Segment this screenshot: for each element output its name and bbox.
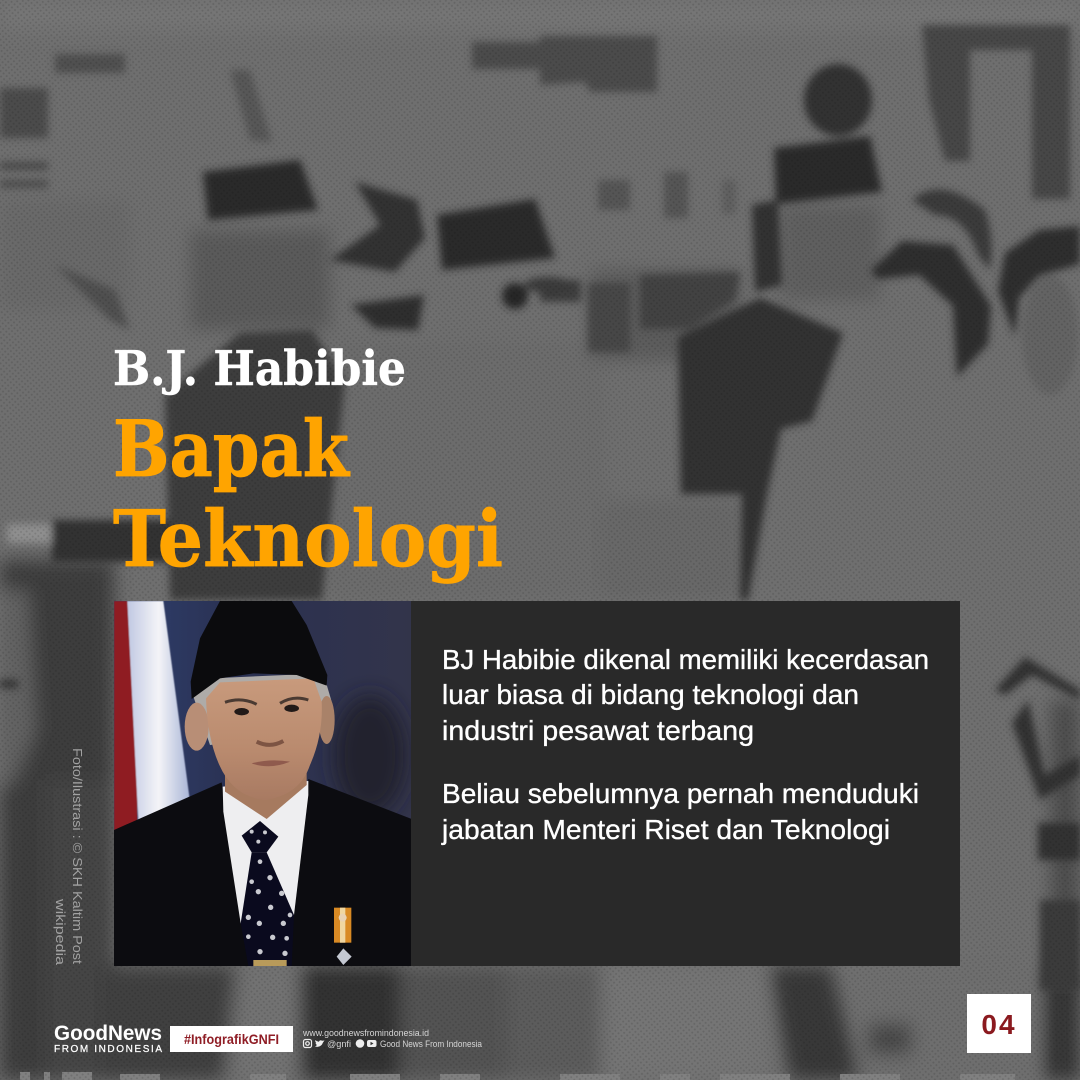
text block: paragraph 2: jabatan Menteri Riset dan Teknologi <box>441 814 890 845</box>
title: Bapak Teknologi: Teknologi <box>113 494 503 585</box>
icon: facebook <box>356 1039 364 1048</box>
photo credit vertical text <box>53 748 85 966</box>
logo: GoodNews From Indonesia <box>54 1021 162 1055</box>
tie <box>241 821 294 966</box>
dark suits <box>165 330 345 600</box>
title: B.J. Habibie: B.J. Habibie <box>113 341 406 397</box>
photo credit vertical text: wikipedia <box>53 898 68 966</box>
logo: GoodNews From Indonesia: FROM INDONESIA <box>54 1044 162 1055</box>
text block: paragraph 2 <box>441 778 919 845</box>
title: Bapak Teknologi: Bapak <box>113 404 351 495</box>
man two mess <box>330 182 425 272</box>
photo credit vertical text: Foto/Ilustrasi : © SKH Kaltim Post <box>70 748 85 964</box>
logo: GoodNews From Indonesia: GoodNews <box>54 1021 162 1045</box>
hashtag badge: #InfografikGNFI <box>184 1032 279 1047</box>
text block: paragraph 1: luar biasa di bidang teknologi dan <box>442 679 859 710</box>
social links: www.goodnewsfromindonesia.id <box>302 1028 429 1038</box>
text block: paragraph 1: BJ Habibie dikenal memiliki kecerdasan <box>442 644 929 675</box>
text block: paragraph 1 <box>442 644 929 746</box>
social links: Good News From Indonesia <box>380 1039 482 1049</box>
icon: instagram <box>304 1040 312 1048</box>
social links: @gnfi <box>327 1039 351 1049</box>
social links <box>302 1028 482 1049</box>
hair and ears <box>192 673 333 745</box>
peci hats <box>203 160 318 220</box>
lower right folds <box>995 657 1080 700</box>
suit <box>114 782 250 970</box>
hashtag badge <box>170 1026 293 1052</box>
title: Bapak Teknologi <box>113 404 503 585</box>
text block: paragraph 2: Beliau sebelumnya pernah menduduki <box>442 778 919 809</box>
icon: twitter <box>315 1040 324 1047</box>
peci hat <box>191 601 327 699</box>
hair <box>871 241 991 377</box>
icon: youtube <box>367 1040 376 1047</box>
faces <box>1022 275 1078 395</box>
cut-off caption fragments at bottom edge <box>20 1072 1015 1080</box>
shirt <box>223 781 308 923</box>
face <box>206 678 322 800</box>
medal <box>334 908 352 965</box>
neck <box>225 768 307 819</box>
text block: paragraph 1: industri pesawat terbang <box>442 715 754 746</box>
page number: 04 <box>981 1009 1017 1040</box>
page number <box>967 994 1031 1053</box>
panel: description <box>411 601 960 966</box>
portrait photo of B.J. Habibie <box>110 595 420 970</box>
